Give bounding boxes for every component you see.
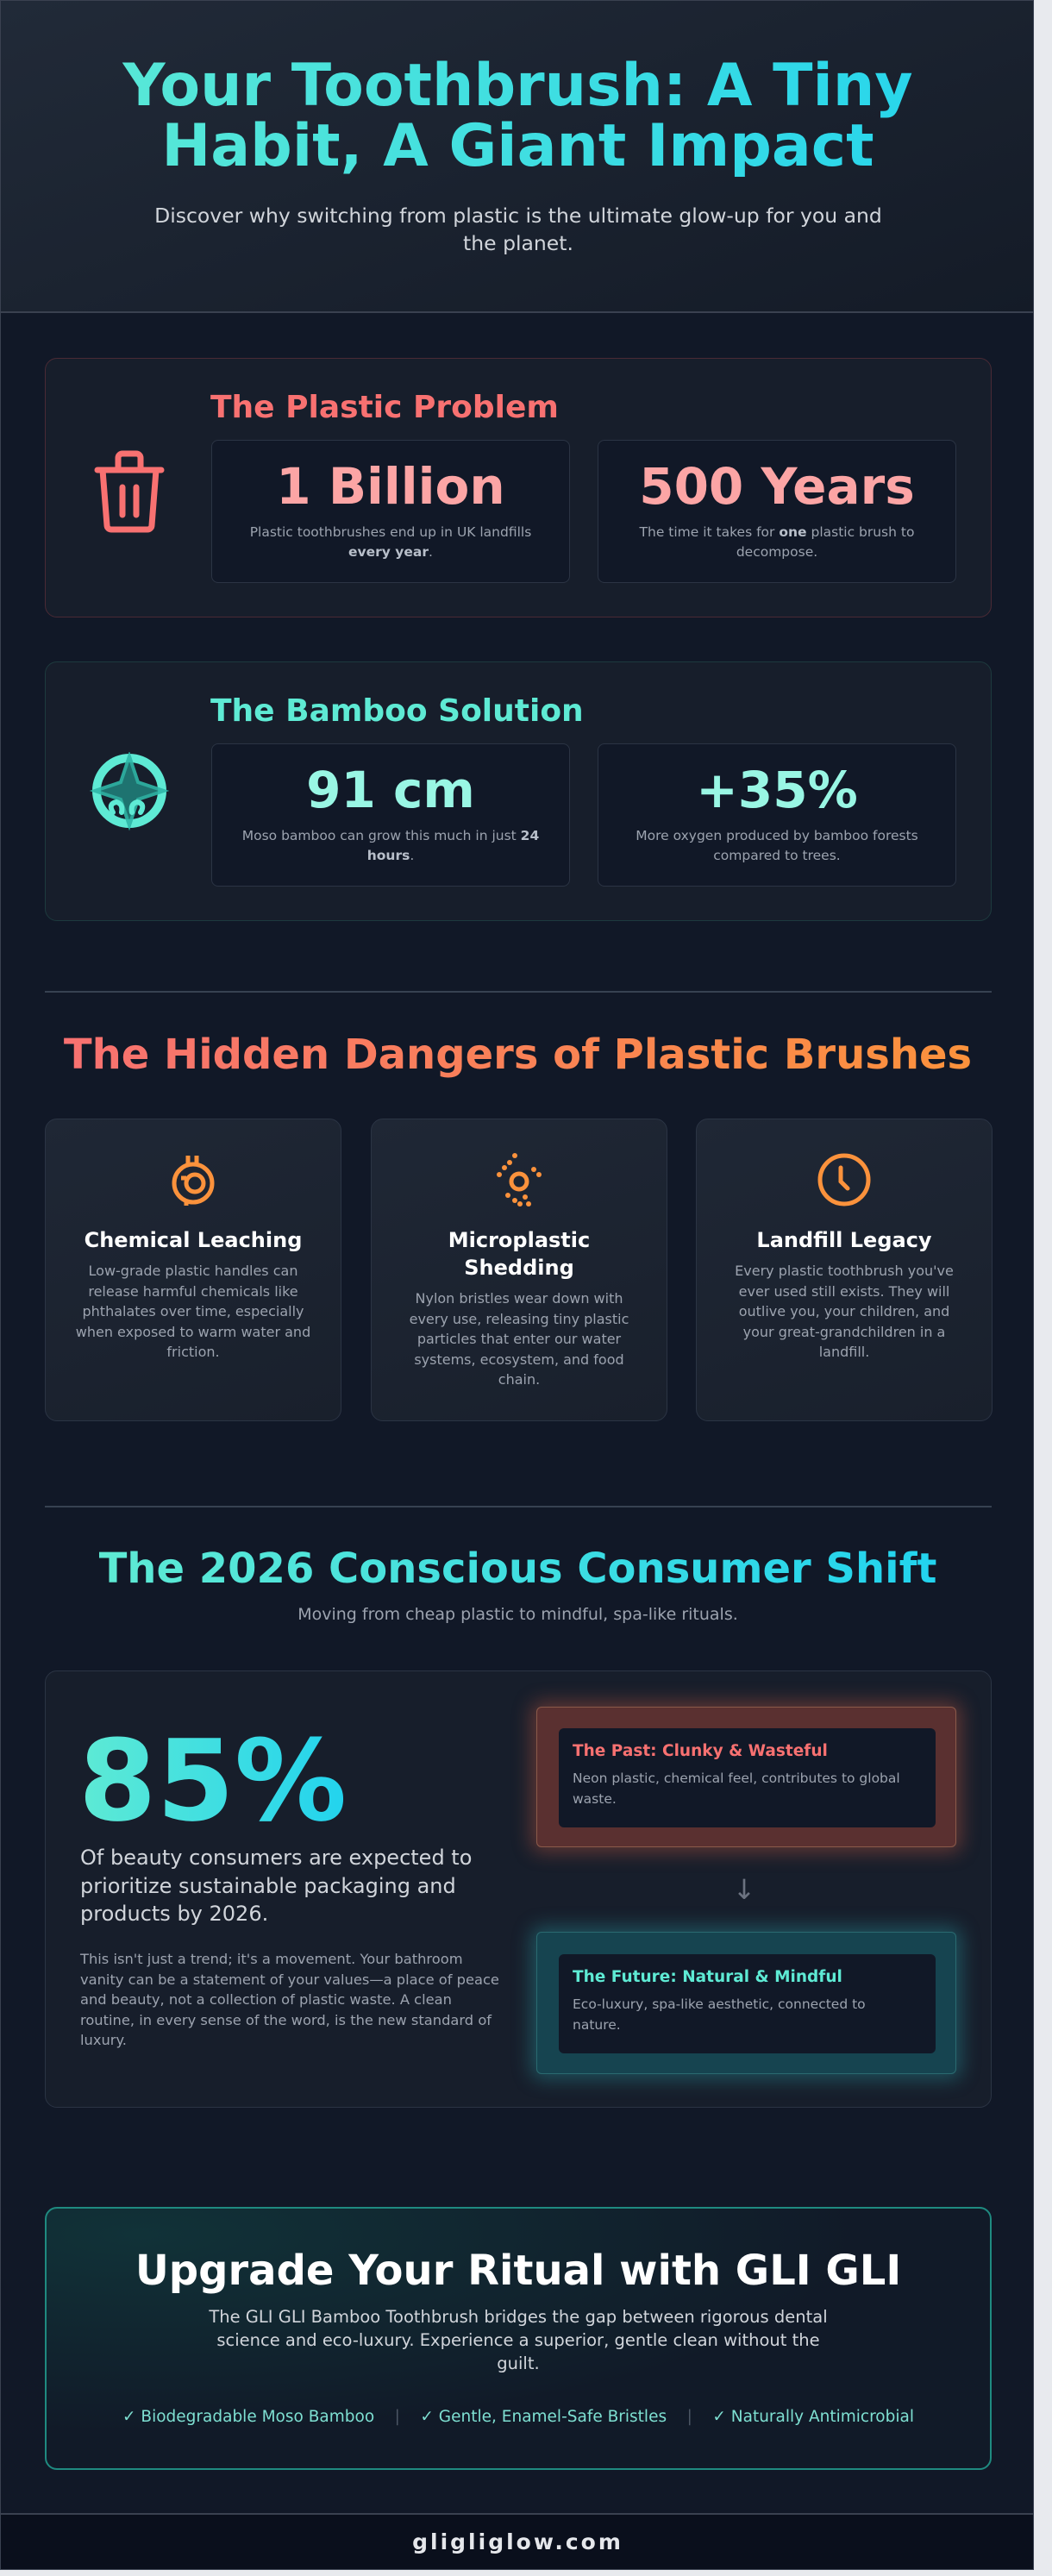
panel: consumer shift [45, 1670, 992, 2108]
title: Habit, A Giant Impact [161, 112, 874, 180]
card: microplastic shedding: Shedding [464, 1256, 574, 1280]
icon: trash [95, 450, 164, 533]
text: stat description: Of beauty consumers are expected to prioritize sustainable packaging and products by 2026. [80, 1846, 472, 1926]
box: the past [536, 1707, 956, 1847]
stat: +35% [598, 743, 956, 887]
heading: consumer shift: The 2026 Conscious Consumer Shift [99, 1545, 936, 1593]
box: the future: The Future: Natural & Mindful [573, 1968, 842, 1986]
text: paragraph [79, 1951, 499, 2048]
icon: chemical [172, 1156, 214, 1206]
card: chemical leaching: Low-grade plastic handles can release harmful chemicals like phthalates over time, especially when exposed to warm water and friction. [76, 1263, 310, 1360]
text: paragraph: luxury. [80, 2032, 127, 2048]
cta heading: Upgrade Your Ritual with GLI GLI [135, 2247, 901, 2295]
text: paragraph: and beauty, not a collection of plastic waste. A clean [80, 1991, 452, 2008]
card: landfill legacy: Landfill Legacy [756, 1228, 932, 1252]
arrow: ↓ [733, 1873, 755, 1906]
card: microplastic shedding [371, 1119, 667, 1421]
stat: 1 billion: Plastic toothbrushes end up in UK landfills every year. [250, 524, 531, 560]
card: microplastic shedding: Microplastic [448, 1228, 590, 1252]
box: the future: Eco-luxury, spa-like aesthetic, connected to nature. [573, 1996, 866, 2033]
footer [1, 2513, 1035, 2571]
stat: 91 cm: Moso bamboo can grow this much in just 24 hours. [242, 828, 539, 863]
heading: The Bamboo Solution [210, 693, 584, 729]
stat: +35%: More oxygen produced by bamboo forests compared to trees. [636, 828, 918, 863]
stat: 500 years [598, 440, 956, 583]
subheading: Moving from cheap plastic to mindful, spa-like rituals. [297, 1605, 738, 1624]
panel: call to action [45, 2207, 992, 2470]
card: microplastic shedding: Nylon bristles wear down with every use, releasing tiny plastic particles that enter our water systems, ecosystem, and food chain. [410, 1290, 629, 1388]
stat: 500 years: 500 Years [639, 457, 915, 516]
stat: 91 cm: 91 cm [306, 761, 475, 819]
icon: clock [817, 1154, 871, 1206]
footer: gligliglow.com [412, 2529, 623, 2554]
card: chemical leaching: Chemical Leaching [85, 1228, 302, 1252]
card: landfill legacy: Every plastic toothbrush you've ever used still exists. They will outlive you, your children, and your great-grandchildren in a landfill. [735, 1263, 954, 1360]
card: landfill legacy [696, 1119, 993, 1421]
stat: 1 billion [211, 440, 570, 583]
title [1, 56, 1035, 177]
heading: The Plastic Problem [210, 390, 559, 425]
text: paragraph: routine, in every sense of the word, is the new standard of [80, 2011, 492, 2028]
text: paragraph: This isn't just a trend; it's a movement. Your bathroom [80, 1951, 463, 1967]
cta text: The GLI GLI Bamboo Toothbrush bridges the gap between rigorous dental science and eco-luxury. Experience a superior, gentle clean without the guilt. [209, 2307, 828, 2373]
icon: microplastics [497, 1153, 542, 1207]
feature list: ✓ Biodegradable Moso Bamboo | ✓ Gentle, Enamel-Safe Bristles | ✓ Naturally Antimicrobial [122, 2408, 914, 2426]
title: Your Toothbrush: A Tiny [122, 52, 913, 120]
card: chemical leaching [45, 1119, 341, 1421]
heading: hidden dangers: The Hidden Dangers of Plastic Brushes [64, 1031, 972, 1079]
box: the future [536, 1932, 956, 2074]
stat: 1 billion: 1 Billion [276, 457, 505, 516]
header [1, 1, 1035, 313]
stat: 85%: 85% [78, 1715, 347, 1846]
stat: 500 years: The time it takes for one plastic brush to decompose. [640, 524, 914, 560]
icon: bamboo star [90, 752, 169, 831]
text: paragraph: vanity can be a statement of your values—a place of peace [80, 1971, 499, 1987]
stat: 91 cm [211, 743, 570, 887]
panel: bamboo solution [45, 661, 992, 921]
box: the past: The Past: Clunky & Wasteful [573, 1742, 828, 1760]
panel: plastic problem [45, 358, 992, 617]
box: the past: Neon plastic, chemical feel, contributes to global waste. [573, 1771, 900, 1807]
subtitle: Discover why switching from plastic is the ultimate glow-up for you and the planet. [154, 204, 882, 255]
stat: +35%: +35% [696, 761, 858, 819]
